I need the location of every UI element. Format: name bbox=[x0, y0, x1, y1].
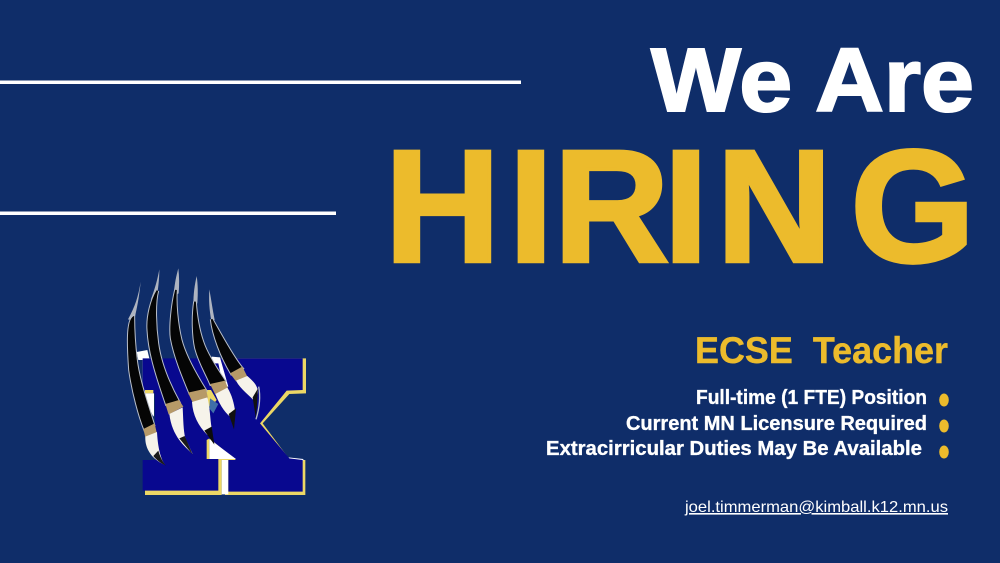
claw 5 bbox=[209, 289, 260, 419]
claw 1 bbox=[128, 282, 166, 466]
contact email: joel.timmerman@kimball.k12.mn.us bbox=[684, 499, 948, 516]
job title: ECSE Teacher bbox=[695, 330, 948, 371]
letter K bbox=[137, 350, 306, 495]
heading: HIRING: HIRING bbox=[385, 116, 975, 296]
requirement: full-time: Full-time (1 FTE) Position bbox=[696, 386, 927, 409]
lower white rule bbox=[0, 212, 336, 215]
heading: We Are: We Are bbox=[651, 31, 974, 131]
requirement: licensure: Current MN Licensure Required bbox=[626, 412, 927, 435]
gold bullet dots bbox=[939, 394, 949, 458]
top white rule bbox=[0, 80, 521, 84]
claw 2 bbox=[148, 269, 193, 455]
claw 3 bbox=[171, 268, 214, 445]
logo: K with claw marks bbox=[128, 268, 306, 495]
claw 4 bbox=[193, 276, 236, 429]
requirement: duties: Extracirricular Duties May Be Available bbox=[546, 437, 922, 460]
requirements list bbox=[546, 386, 927, 460]
